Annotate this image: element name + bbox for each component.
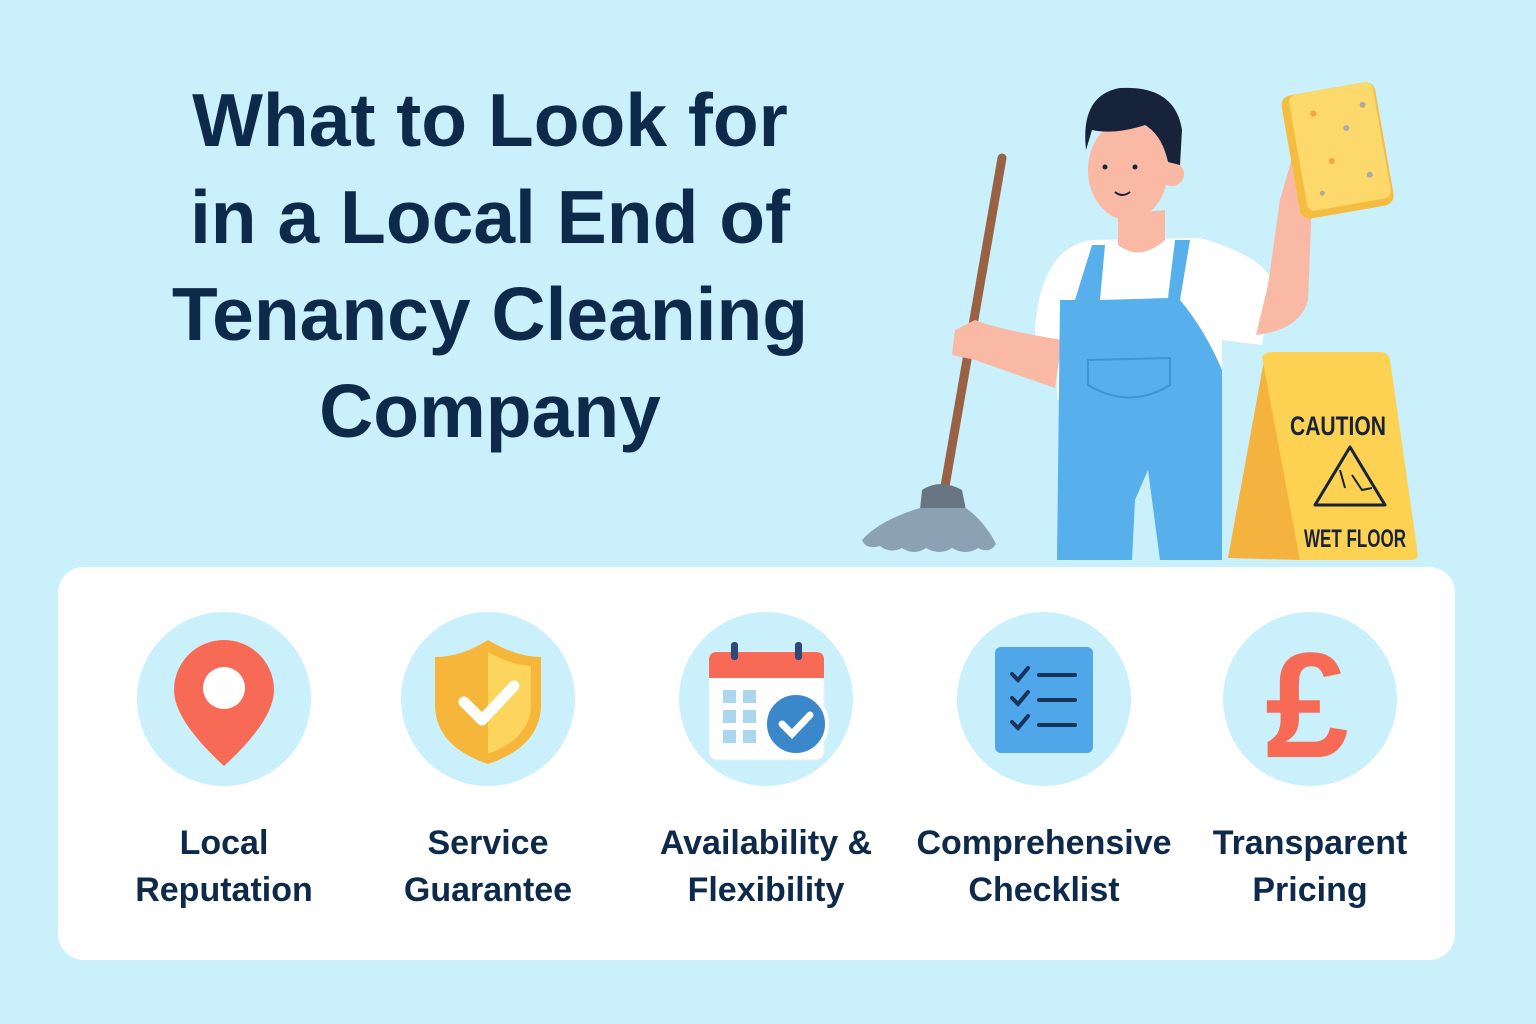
item: comprehensive checklist [916,612,1172,909]
title: in a Local End of [190,175,790,259]
item: local reputation: Local [180,824,268,862]
title: What to Look for [192,78,788,162]
caution sign [1228,352,1418,560]
caution sign: CAUTION [1290,411,1386,441]
item: availability & flexibility [660,612,872,909]
sponge [1280,81,1395,220]
panel: features [58,567,1455,960]
item: transparent pricing: Pricing [1252,871,1368,909]
title: Tenancy Cleaning [172,272,808,356]
item: availability & flexibility: Flexibility [688,871,844,909]
item: transparent pricing [1213,612,1407,909]
item: transparent pricing: £ [1265,621,1349,786]
item: transparent pricing: Transparent [1213,824,1407,862]
mop [862,158,1002,552]
caution sign: WET FLOOR [1304,525,1406,553]
cleaner [952,88,1312,560]
item: service guarantee [401,612,575,909]
item: comprehensive checklist: Comprehensive [916,824,1172,862]
item: local reputation [135,612,313,909]
item: availability & flexibility: Availability & [660,824,872,862]
title [172,78,808,453]
item: local reputation: Reputation [135,871,313,909]
title: Company [319,369,661,453]
item: service guarantee: Service [428,824,548,862]
item: service guarantee: Guarantee [404,871,572,909]
item: comprehensive checklist: Checklist [968,871,1120,909]
illustration: cleaner with mop, sponge and caution sign [862,82,1418,560]
